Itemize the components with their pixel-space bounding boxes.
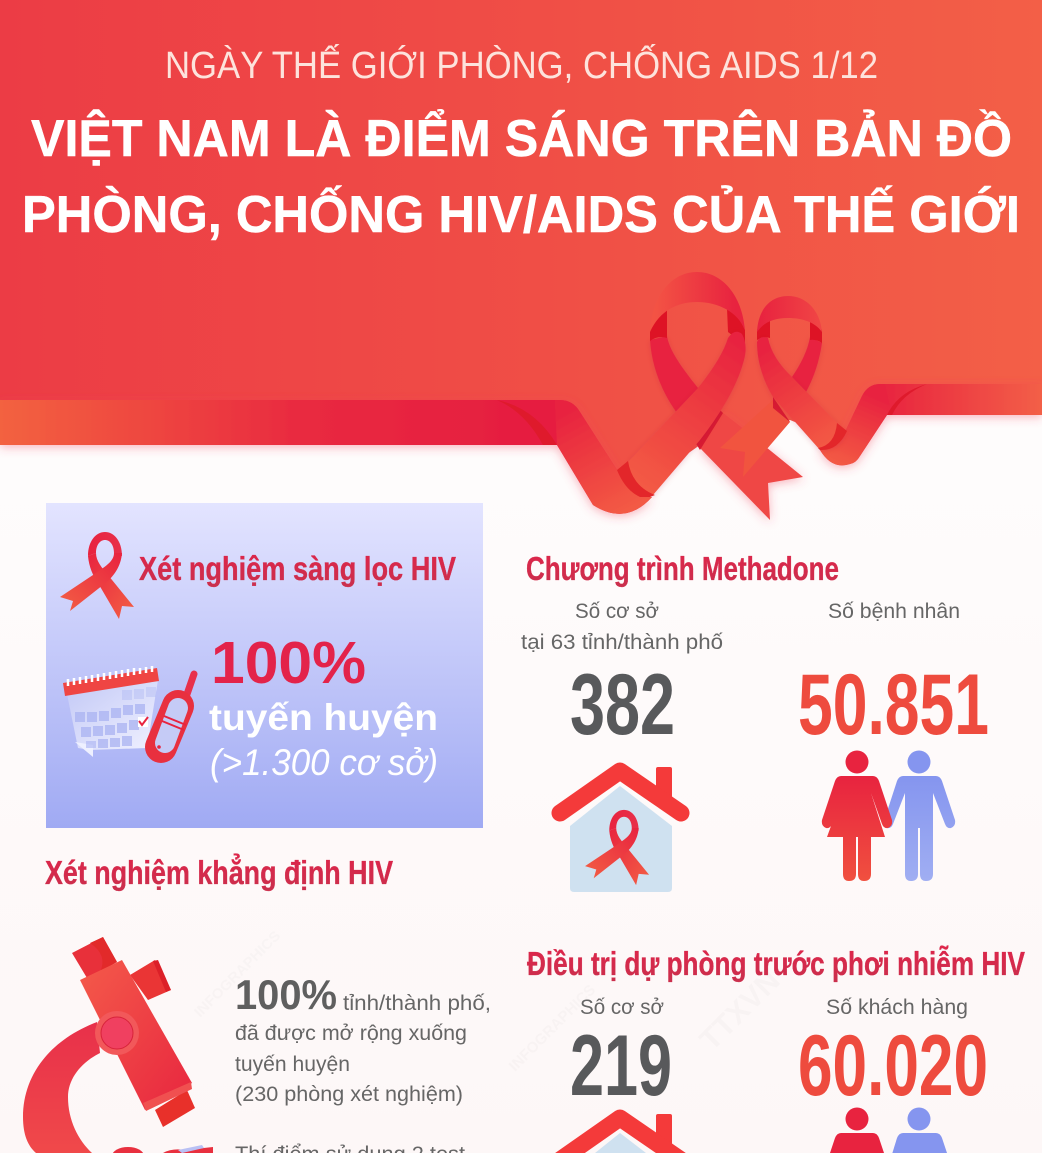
ribbon: large loop [617,272,803,520]
icon: ribbon [60,532,134,619]
text: 100% provinces [235,971,491,1153]
header banner [0,0,1042,520]
ribbon: small loop [720,296,847,477]
panel: confirmation [23,937,491,1153]
panel: Methadone [521,550,989,892]
icon: people [822,750,955,881]
stat: 100%: 100% [211,630,366,696]
text: 100% provinces: tỉnh/thành phố, [343,991,491,1015]
number: 219: 219 [570,1018,672,1114]
icon: calendar [63,666,159,757]
label: facilities [521,599,723,654]
title [22,42,1020,244]
stat note: (>1.300 cơ sở) [210,742,438,783]
watermark: INFOGRAPHICS [506,981,599,1075]
title line 3: PHÒNG, CHỐNG HIV/AIDS CỦA THẾ GIỚI [22,185,1020,244]
stat label: tuyến huyện: tuyến huyện [209,697,438,738]
watermark: TTXVN [694,964,786,1057]
text: 100% provinces: (230 phòng xét nghiệm) [235,1082,463,1106]
title line 2: VIỆT NAM LÀ ĐIỂM SÁNG TRÊN BẢN ĐỒ [31,109,1012,168]
ribbon tail large [700,413,803,520]
label: facilities: Số cơ sở [580,995,664,1019]
ribbon fold: right dark [887,384,927,415]
watermark: INFOGRAPHICS [191,927,284,1021]
heading: Methadone: Chương trình Methadone [526,550,839,587]
title line 1: NGÀY THẾ GIỚI PHÒNG, CHỐNG AIDS 1/12 [165,42,878,87]
heading: confirmation: Xét nghiệm khẳng định HIV [45,853,393,891]
label: facilities: tại 63 tỉnh/thành phố [521,630,723,654]
label: facilities: Số cơ sở [575,599,659,623]
label: patients: Số bệnh nhân [828,599,960,623]
heading: screening: Xét nghiệm sàng lọc HIV [139,550,456,587]
number: 382: 382 [570,657,675,753]
ribbon band: left [0,400,652,514]
text: 100% provinces: tuyến huyện [235,1052,350,1076]
panel: HIV screening [46,503,483,828]
label: clients: Số khách hàng [826,995,968,1019]
icon: house [560,767,681,892]
ribbon band: right [820,384,1042,465]
icon: microscope [23,937,213,1153]
ribbon fold: left dark [497,400,557,445]
icon: people [822,1108,955,1153]
icon: test tube [157,674,194,749]
panel: PrEP [527,945,1025,1153]
text: 100% provinces: 100% [235,971,337,1018]
icon: house [560,1114,681,1153]
text: 100% provinces: đã được mở rộng xuống [235,1021,467,1045]
watermark [191,927,786,1075]
